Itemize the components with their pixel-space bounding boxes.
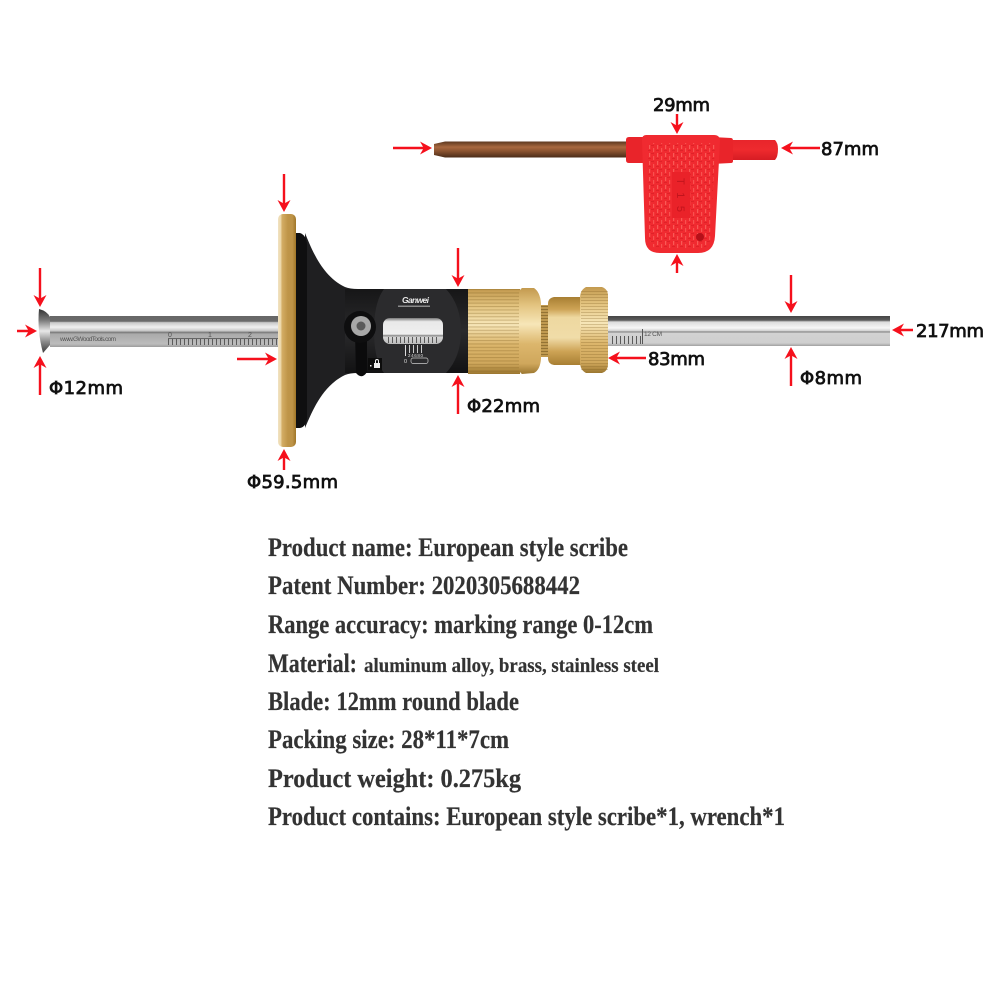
spec: product name: Product name: European style scribe [268, 533, 628, 562]
vernier: 0 [404, 359, 407, 365]
brass collar [548, 297, 586, 365]
lock icon [368, 358, 382, 370]
locking lever [344, 311, 376, 376]
left rod scale: 2 [248, 332, 252, 339]
dimension: 8mm: Φ8mm [800, 368, 862, 389]
wrench [434, 135, 778, 253]
left rod [50, 316, 280, 347]
spec: material: Material: [268, 649, 357, 678]
window scale [388, 337, 440, 343]
wrench flag label: T15 [674, 178, 686, 212]
dimension: 83mm [237, 349, 705, 370]
spec: patent number: Patent Number: 2020305688442 [268, 571, 580, 600]
wrench collars [626, 137, 733, 164]
spec: product weight: Product weight: 0.275kg [268, 764, 521, 793]
dimension: 87mm: 87mm [821, 139, 879, 160]
dimension: 8mm [784, 275, 862, 389]
dark disk behind flange [294, 233, 307, 428]
window [383, 318, 443, 344]
black body [345, 289, 470, 373]
brass knurled sleeve [468, 289, 520, 374]
dimension: 59.5mm [247, 174, 338, 493]
wrench shaft [434, 142, 626, 158]
brass ring [519, 288, 541, 374]
round blade [38, 309, 50, 353]
dimension: 217mm [17, 321, 984, 342]
right rod scale: 12 CM [644, 331, 662, 338]
right rod scale [610, 329, 662, 344]
dimension: 87mm [393, 139, 879, 160]
left rod scale: 0 [168, 332, 172, 339]
wrench flag texture [648, 143, 715, 249]
spec: blade: Blade: 12mm round blade [268, 687, 519, 716]
dimension: 22mm: Φ22mm [467, 396, 540, 417]
spec: product contains: Product contains: European style scribe*1, wrench*1 [268, 802, 785, 831]
dimension: 12mm: Φ12mm [49, 378, 123, 399]
vernier: 2 4 6 8 0 [408, 353, 423, 358]
marking gauge [38, 214, 890, 447]
black cone [305, 233, 358, 428]
brass knurled nut [580, 287, 608, 373]
brand name: Ganwei [402, 295, 430, 305]
dimension: 59.5mm: Φ59.5mm [247, 472, 338, 493]
spec: material [268, 649, 660, 678]
brass flange [278, 214, 296, 447]
wrench handle cylinder [716, 140, 778, 160]
dimension: 29mm: 29mm [653, 95, 710, 116]
dimension: 22mm [452, 248, 540, 417]
spec: packing size: Packing size: 28*11*7cm [268, 725, 509, 754]
dimension: 29mm [653, 95, 710, 273]
right rod [604, 316, 890, 346]
vernier [404, 345, 428, 365]
scale panel [374, 289, 461, 373]
wrench flag label [672, 172, 690, 218]
spec: material: aluminum alloy, brass, stainless steel [364, 656, 660, 677]
dimension: 12mm [34, 268, 123, 399]
spec: range accuracy: Range accuracy: marking range 0-12cm [268, 610, 653, 639]
left rod url: www.GWoodTools.com [59, 336, 116, 343]
wrench hole [696, 233, 704, 241]
dimension: 83mm: 83mm [648, 349, 705, 370]
dimension: 217mm: 217mm [916, 321, 984, 342]
brand url [398, 306, 430, 307]
thread [538, 305, 552, 357]
wrench flag handle [642, 135, 720, 253]
product specifications [268, 533, 785, 831]
left rod scale: 1 [208, 332, 212, 339]
left rod scale [168, 332, 280, 345]
